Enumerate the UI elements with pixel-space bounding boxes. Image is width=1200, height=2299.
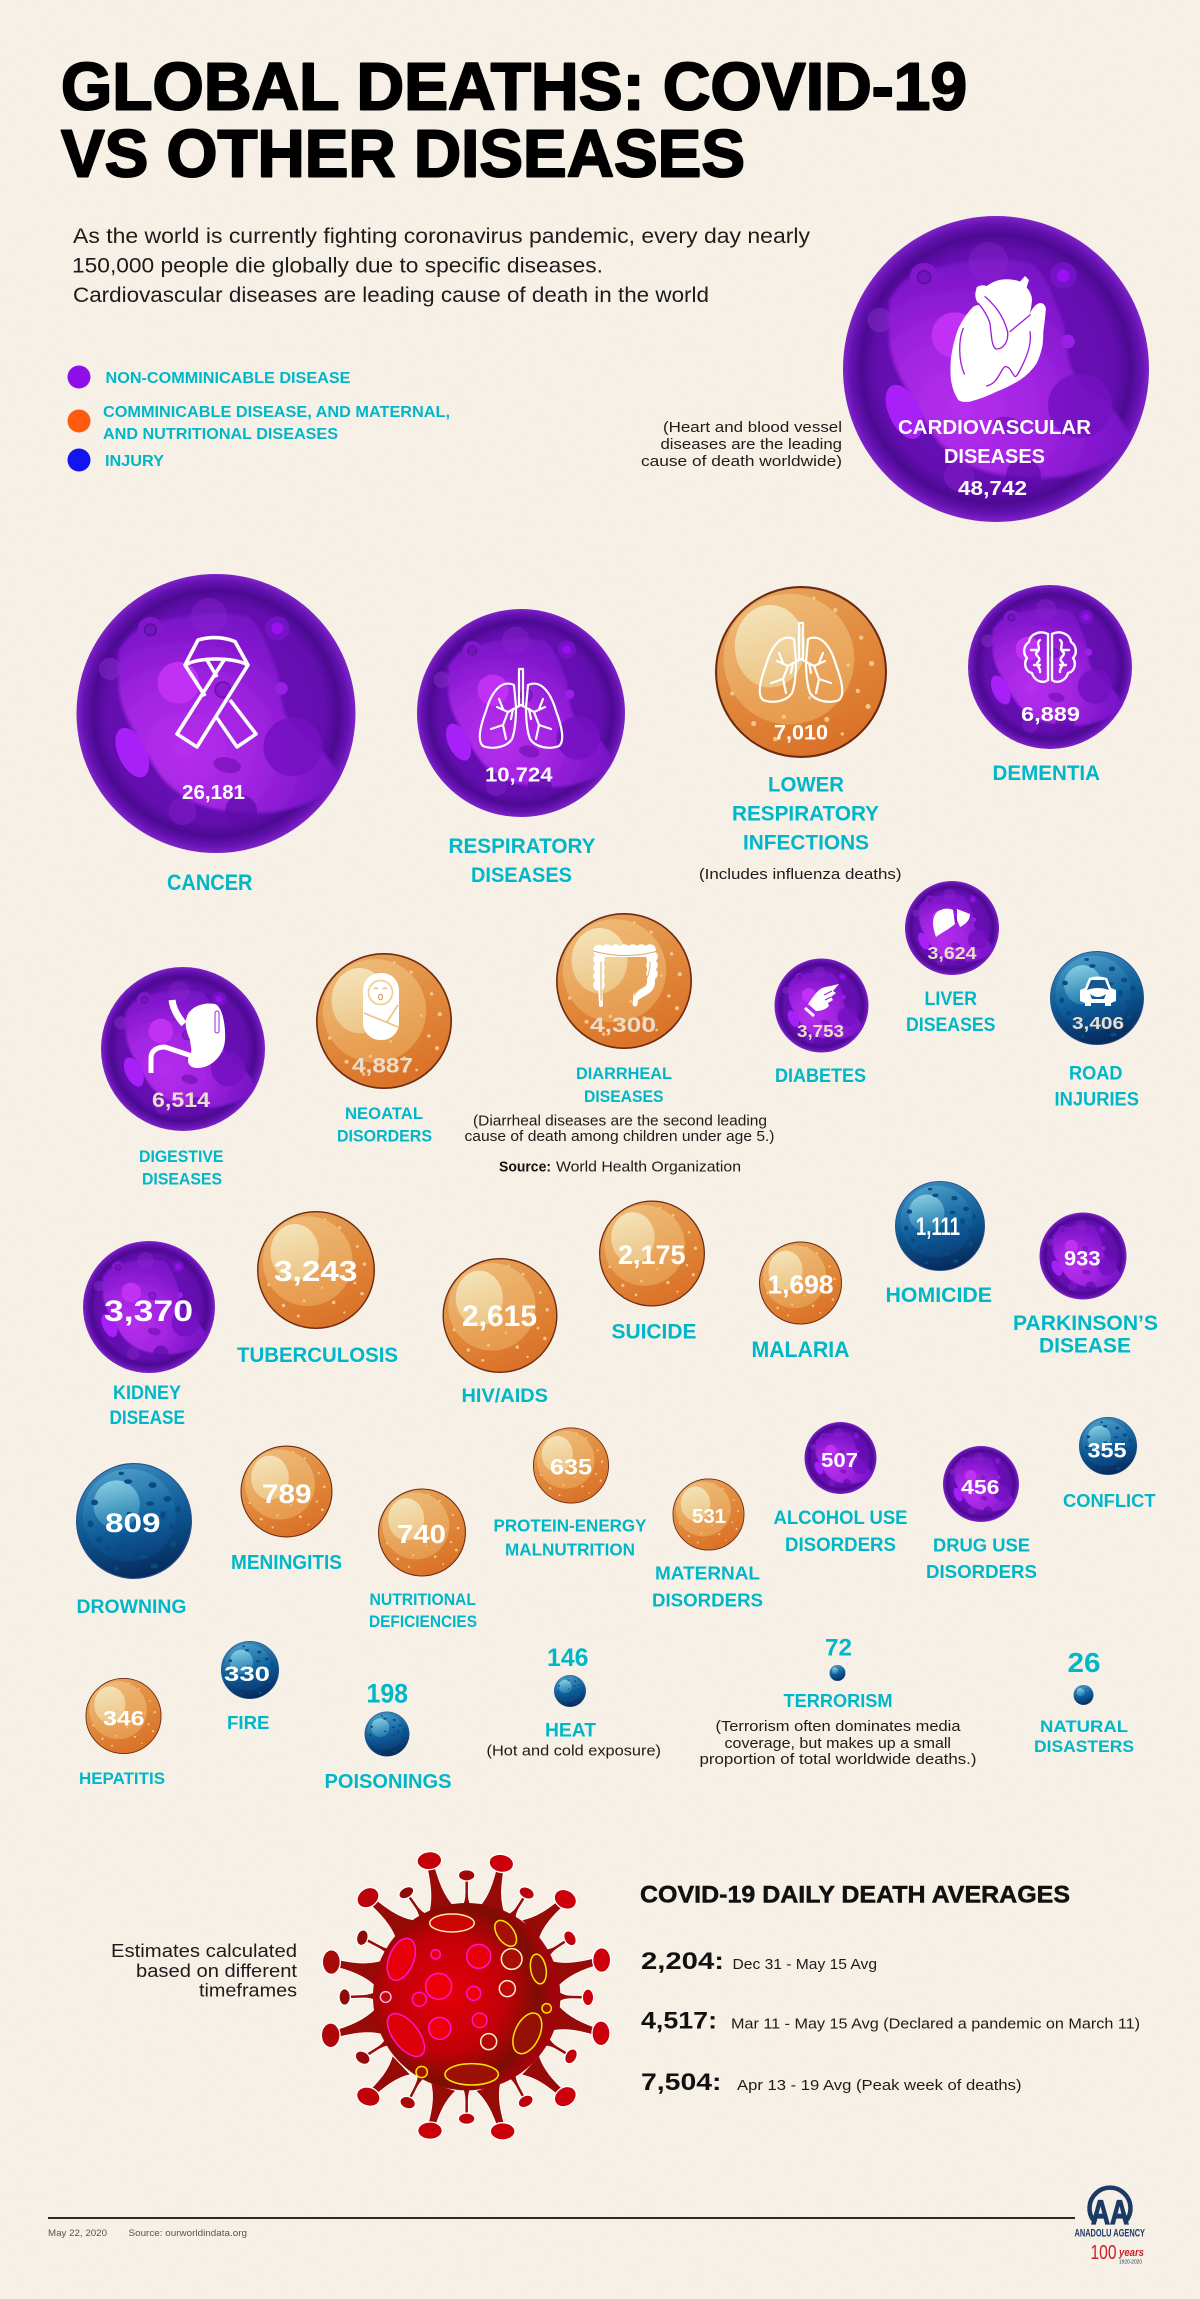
value: 146 — [547, 1644, 588, 1672]
panel: protein-energy malnutrition — [494, 1428, 647, 1560]
footer: date and source: May 22, 2020 — [48, 2228, 107, 2239]
bubble — [968, 585, 1132, 749]
bubble — [759, 1242, 842, 1324]
stat: 2,204 — [641, 1948, 877, 1975]
bubble — [600, 1201, 704, 1306]
legend — [68, 366, 450, 472]
label — [494, 1516, 647, 1560]
value: 4,300 — [590, 1014, 656, 1037]
bubble — [101, 967, 265, 1131]
bubble — [557, 914, 691, 1048]
label — [732, 772, 879, 855]
panel: cardiovascular diseases — [843, 216, 1149, 522]
stat: 7,504: Apr 13 - 19 Avg (Peak week of deaths) — [737, 2077, 1022, 2094]
panel: diarrheal diseases — [464, 914, 774, 1145]
note: cardiovascular: diseases are the leading — [660, 437, 842, 453]
label: POISONINGS — [324, 1770, 452, 1793]
label: DISEASES — [471, 863, 572, 887]
note — [464, 1114, 774, 1145]
title: GLOBAL DEATHS: COVID-19 — [61, 50, 967, 124]
note: estimates: timeframes — [199, 1980, 297, 2000]
footer: date and source: Source: ourworldindata.org — [128, 2228, 247, 2239]
value: 330 — [224, 1662, 270, 1686]
panel: heat — [486, 1644, 661, 1760]
panel: alcohol use disorders — [774, 1422, 908, 1556]
logo: anadolu agency — [1074, 2188, 1145, 2266]
value: 4,887 — [352, 1054, 413, 1078]
bubble — [774, 958, 868, 1052]
panel: nutritional deficiencies — [369, 1489, 477, 1631]
value: 346 — [103, 1708, 144, 1730]
label: DISEASES — [142, 1170, 222, 1188]
bubble — [1040, 1212, 1126, 1300]
note: estimates — [111, 1941, 297, 2000]
label: DIARRHEAL — [576, 1064, 672, 1083]
icon: car — [1080, 976, 1116, 1006]
icon: stomach — [151, 1000, 225, 1073]
value: 6,889 — [1021, 704, 1080, 726]
label: SUICIDE — [612, 1320, 696, 1344]
label — [1034, 1717, 1134, 1756]
value: 456 — [961, 1476, 1000, 1499]
label: TUBERCULOSIS — [237, 1344, 398, 1367]
panel: cancer — [76, 574, 356, 895]
label: DISEASES — [944, 446, 1045, 468]
bubble — [716, 587, 886, 757]
footer: date and source — [48, 2228, 247, 2239]
source note: Source: — [499, 1160, 551, 1176]
panel: hepatitis — [79, 1678, 165, 1788]
logo: anadolu agency: years — [1118, 2247, 1144, 2259]
label: INFECTIONS — [743, 831, 869, 855]
label: RESPIRATORY — [448, 834, 596, 858]
bubble — [241, 1446, 332, 1537]
value: 10,724 — [485, 764, 553, 786]
panel: kidney disease — [83, 1241, 215, 1429]
heading: covid-19 averages: COVID-19 DAILY DEATH AVERAGES — [640, 1882, 1070, 1908]
label: MALNUTRITION — [505, 1540, 635, 1560]
panel: dementia — [968, 585, 1132, 785]
label: HOMICIDE — [886, 1283, 992, 1307]
value: 3,753 — [797, 1021, 844, 1041]
label: FIRE — [227, 1712, 270, 1733]
label: DISORDERS — [652, 1590, 763, 1610]
label: DIGESTIVE — [139, 1148, 224, 1166]
label: MALARIA — [752, 1337, 850, 1362]
icon: ribbon — [177, 638, 256, 747]
note: (Includes influenza deaths) — [699, 866, 902, 883]
stat: 7,504: 7,504: — [641, 2069, 722, 2096]
panel: tuberculosis — [237, 1212, 398, 1367]
bubble — [1079, 1417, 1137, 1475]
value: 7,010 — [774, 722, 828, 744]
bubble — [943, 1446, 1019, 1522]
value: 355 — [1088, 1438, 1127, 1462]
label: PARKINSON’S — [1013, 1312, 1158, 1335]
note: (Terrorism often dominates media — [716, 1719, 962, 1735]
legend item: injury: INJURY — [105, 453, 165, 470]
panel: diabetes — [774, 958, 868, 1087]
value: 789 — [262, 1479, 312, 1509]
label: HIV/AIDS — [462, 1386, 548, 1407]
panel: conflict — [1063, 1417, 1156, 1511]
label: DROWNING — [76, 1597, 186, 1618]
label — [576, 1064, 672, 1106]
intro text: As the world is currently fighting coronavirus pandemic, every day nearly — [73, 225, 811, 248]
bubble — [1050, 951, 1144, 1045]
legend item: non-communicable: NON-COMMINICABLE DISEASE — [106, 370, 350, 387]
icon: lungs — [760, 623, 842, 702]
note: cardiovascular: cause of death worldwide) — [641, 454, 842, 470]
bubble — [76, 574, 356, 853]
value: 3,624 — [928, 943, 977, 963]
stat: 4,517 — [641, 2008, 1140, 2034]
label — [1054, 1062, 1139, 1110]
panel: suicide — [600, 1201, 704, 1344]
label: NATURAL — [1040, 1717, 1128, 1736]
bubble — [379, 1489, 465, 1576]
label: DISEASES — [906, 1014, 996, 1036]
label: LOWER — [768, 772, 844, 796]
note: estimates: based on different — [136, 1961, 297, 1981]
panel: liver diseases — [905, 881, 999, 1036]
value: 2,615 — [462, 1300, 537, 1333]
icon: brain — [1024, 632, 1076, 682]
panel: fire — [221, 1641, 279, 1733]
panel: hiv/aids — [443, 1259, 557, 1407]
bubble — [905, 881, 999, 975]
label: DEMENTIA — [992, 762, 1100, 785]
note: cardiovascular — [641, 420, 842, 470]
label: LIVER — [924, 988, 977, 1010]
label: TERRORISM — [784, 1690, 892, 1711]
value: 3,243 — [274, 1256, 358, 1288]
icon: swaddled baby — [363, 973, 399, 1040]
title — [61, 50, 967, 192]
panel: respiratory diseases — [417, 609, 625, 887]
panel: homicide — [886, 1181, 992, 1307]
icon: lungs — [480, 669, 562, 748]
panel: parkinson's disease — [1013, 1212, 1158, 1358]
label: HEAT — [545, 1720, 596, 1742]
note: coverage, but makes up a small — [724, 1736, 951, 1752]
value: 3,406 — [1072, 1013, 1124, 1033]
panel: maternal disorders — [652, 1479, 763, 1610]
bubble — [843, 216, 1149, 522]
label: DISORDERS — [337, 1126, 432, 1146]
label: NUTRITIONAL — [370, 1591, 476, 1609]
label: MENINGITIS — [231, 1552, 342, 1574]
value: 809 — [105, 1508, 160, 1538]
label: INJURIES — [1054, 1088, 1139, 1110]
legend item: communicable: COMMINICABLE DISEASE, AND MATERNAL, — [103, 404, 450, 421]
legend item: communicable — [68, 404, 450, 443]
bubble — [830, 1665, 845, 1681]
bubble — [804, 1422, 876, 1494]
logo: anadolu agency: ANADOLU AGENCY — [1074, 2228, 1145, 2240]
note: cardiovascular: (Heart and blood vessel — [663, 420, 842, 436]
legend item: injury — [68, 448, 165, 472]
label — [337, 1104, 432, 1146]
panel: poisonings — [324, 1678, 452, 1793]
note: cause of death among children under age 5.) — [464, 1129, 774, 1145]
label: DISEASE — [110, 1408, 185, 1429]
panel: malaria — [752, 1242, 850, 1362]
bubble — [221, 1641, 279, 1699]
intro text: Cardiovascular diseases are leading cause of death in the world — [73, 284, 709, 307]
stat: 2,204: Dec 31 - May 15 Avg — [732, 1956, 877, 1973]
panel: road injuries — [1050, 951, 1144, 1110]
logo: anadolu agency: AA — [1091, 2194, 1129, 2232]
note: estimates: Estimates calculated — [111, 1941, 297, 1961]
label: DISORDERS — [926, 1561, 1037, 1582]
stat: 4,517: 4,517: — [641, 2008, 717, 2034]
label — [139, 1148, 224, 1188]
title: VS OTHER DISEASES — [61, 116, 745, 192]
label: PROTEIN-ENERGY — [494, 1516, 647, 1536]
label: DISEASE — [1039, 1334, 1131, 1358]
source note: World Health Organization — [556, 1160, 741, 1176]
value: 72 — [825, 1634, 852, 1662]
logo: anadolu agency: 1920-2020 — [1119, 2260, 1142, 2266]
value: 26 — [1068, 1647, 1100, 1678]
value: 933 — [1064, 1246, 1101, 1270]
label: KIDNEY — [113, 1383, 181, 1404]
label: NEOATAL — [345, 1104, 423, 1123]
note: proportion of total worldwide deaths.) — [700, 1752, 976, 1768]
value: 26,181 — [182, 782, 245, 804]
label — [448, 834, 596, 887]
intro text — [72, 225, 811, 307]
icon: hand — [805, 984, 839, 1016]
bubble — [83, 1241, 215, 1373]
label: ALCOHOL USE — [774, 1508, 908, 1529]
label: DRUG USE — [933, 1534, 1030, 1556]
value: 1,111 — [916, 1213, 960, 1241]
value: 740 — [397, 1521, 446, 1549]
value: 198 — [366, 1678, 408, 1708]
bubble — [258, 1212, 374, 1328]
panel: natural disasters — [1034, 1647, 1134, 1756]
label — [652, 1564, 763, 1610]
panel: neonatal disorders — [317, 954, 451, 1146]
bubble — [317, 954, 451, 1088]
note: (Diarrheal diseases are the second leading — [473, 1114, 767, 1130]
panel: drowning — [76, 1464, 191, 1618]
value: 6,514 — [152, 1089, 210, 1112]
label — [926, 1534, 1037, 1582]
legend item: non-communicable — [68, 366, 350, 388]
label: 48,742 — [958, 478, 1027, 500]
value: 3,370 — [104, 1295, 193, 1328]
bubble — [1074, 1685, 1093, 1705]
value: 531 — [692, 1505, 726, 1528]
panel: meningitis — [231, 1446, 342, 1574]
bubble — [895, 1181, 985, 1271]
label — [774, 1508, 908, 1556]
label: MATERNAL — [655, 1564, 760, 1584]
bubble — [86, 1678, 161, 1754]
icon: liver — [933, 909, 970, 937]
note — [700, 1719, 976, 1768]
panel: digestive diseases — [101, 967, 265, 1188]
bubble — [673, 1479, 744, 1550]
label: DIABETES — [775, 1065, 866, 1087]
bubble — [443, 1259, 557, 1372]
label — [906, 988, 996, 1036]
bubble — [533, 1428, 609, 1503]
label — [369, 1591, 477, 1631]
icon: heart — [950, 276, 1046, 402]
panel: drug use disorders — [926, 1446, 1037, 1582]
label: CONFLICT — [1063, 1490, 1156, 1511]
label: CARDIOVASCULAR — [898, 417, 1092, 439]
panel: terrorism — [700, 1634, 976, 1768]
value: 1,698 — [768, 1270, 834, 1300]
stat: 7,504 — [641, 2069, 1022, 2096]
label — [110, 1383, 185, 1429]
label: DISEASES — [584, 1087, 664, 1106]
label: HEPATITIS — [79, 1769, 165, 1788]
label: RESPIRATORY — [732, 802, 879, 826]
logo: anadolu agency: 100 — [1090, 2242, 1116, 2264]
value: 2,175 — [618, 1240, 686, 1270]
label: DISASTERS — [1034, 1737, 1134, 1756]
value: 507 — [821, 1449, 858, 1472]
icon: coronavirus — [321, 1851, 611, 2140]
label — [898, 417, 1092, 500]
intro text: 150,000 people die globally due to specific diseases. — [72, 254, 603, 278]
label: CANCER — [167, 870, 253, 895]
label: DEFICIENCIES — [369, 1613, 477, 1631]
panel: lower respiratory infections — [699, 587, 902, 883]
bubble — [77, 1464, 191, 1578]
value: 635 — [550, 1454, 592, 1480]
legend item: communicable: AND NUTRITIONAL DISEASES — [103, 426, 338, 443]
stat: 4,517: Mar 11 - May 15 Avg (Declared a pandemic on March 11) — [731, 2016, 1140, 2032]
label: DISORDERS — [785, 1535, 896, 1556]
icon: intestines — [593, 950, 658, 1005]
stat: 2,204: 2,204: — [641, 1948, 724, 1975]
bubble — [417, 609, 625, 817]
label — [1013, 1312, 1158, 1358]
bubble — [365, 1712, 409, 1756]
note: (Hot and cold exposure) — [486, 1744, 661, 1760]
label: ROAD — [1069, 1062, 1122, 1084]
bubble — [554, 1675, 586, 1707]
